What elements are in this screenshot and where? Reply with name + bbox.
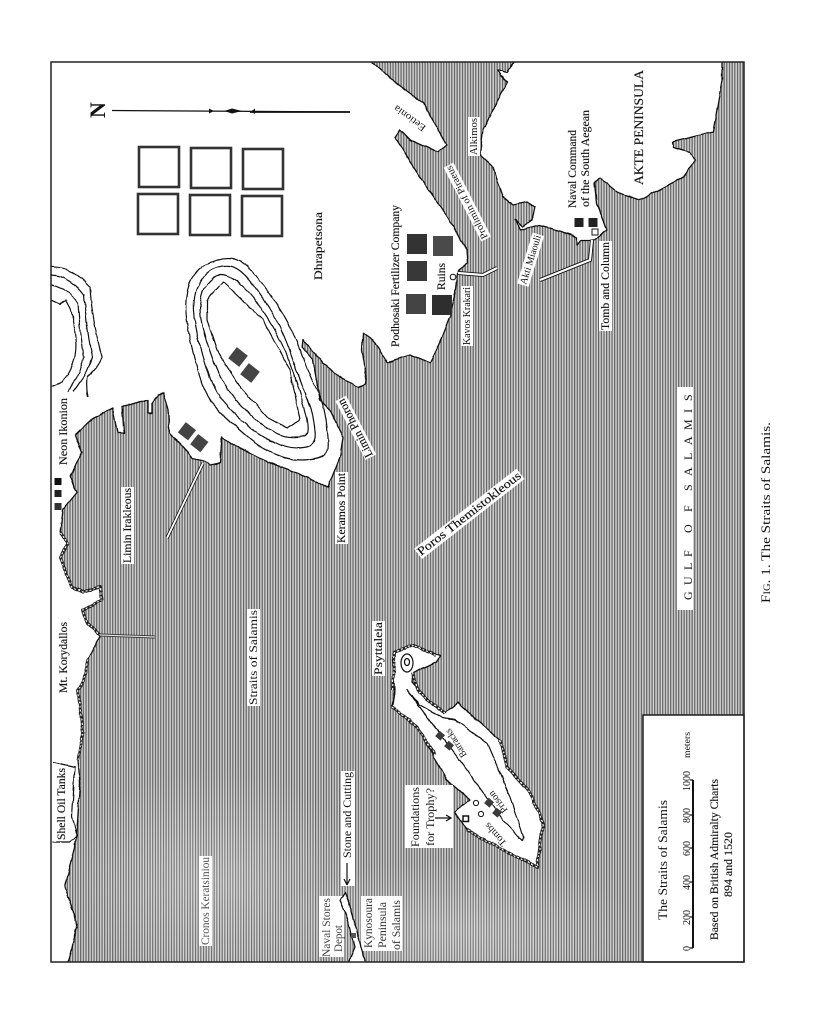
label: Naval Stores Depot [319, 896, 345, 957]
label: Straits of Salamis: Straits of Salamis [246, 610, 260, 705]
scale bar: 400 [682, 875, 693, 890]
building blocks [54, 147, 598, 510]
land: Akte Peninsula [480, 56, 722, 245]
labels on Psyttaleia: Barracks, Prison, Tombs [443, 726, 510, 848]
hill contours: Dhrapetsona [186, 258, 328, 460]
land: Piraeus mainland and Dhrapetsona [45, 56, 468, 968]
labels on land: Neon Ikonion [56, 398, 70, 465]
labels on Psyttaleia: Barracks, Prison, Tombs: Tombs [483, 820, 509, 848]
Shell oil tanks enclosure [53, 762, 77, 842]
label: Kynosoura Peninsula of Salamis: Kynosoura [361, 897, 375, 948]
scale bar: 600 [682, 841, 693, 856]
label: Kynosoura Peninsula of Salamis: of Salamis [389, 900, 403, 950]
labels on land: Ruins [434, 263, 448, 290]
label: Naval Stores Depot: Naval Stores [319, 898, 333, 957]
hill contours: northern hill [51, 267, 102, 397]
land: Kynosoura Peninsula [340, 892, 366, 968]
label: Tomb and Column: Tomb and Column [598, 242, 612, 330]
north arrow [85, 102, 350, 118]
scale bar [682, 731, 693, 951]
label: Psyttaleia: Psyttaleia [371, 621, 385, 675]
label: Alkimos: Alkimos [469, 118, 480, 155]
legend panel with title and scale bar [643, 715, 744, 962]
labels on land: Shell Oil Tanks [54, 768, 68, 840]
labels on land: Podhosaki Fertilizer Company [388, 205, 402, 347]
label: Prolimin of Piraeus: Prolimin of Piraeus [444, 163, 491, 241]
figure caption: Fig. 1. The Straits of Salamis. [758, 422, 773, 603]
scale bar: 800 [682, 808, 693, 823]
label: Poros Themistokleous: Poros Themistokleous [414, 468, 524, 558]
label: Gulf of Salamis: GULF OF SALAMIS [681, 394, 695, 600]
scale bar: 1000 [682, 771, 693, 791]
labels on land: Dhrapetsona [311, 211, 325, 280]
legend panel with title and scale bar: 894 and 1520 [721, 832, 735, 897]
moles and breakwaters [100, 240, 592, 637]
labels on land: Mt. Korydallos [56, 622, 70, 693]
map frame and sea hatching [51, 62, 744, 1000]
labels on land: Naval Command [565, 130, 579, 208]
labels on land [54, 69, 646, 840]
label: Limin Phoron: Limin Phoron [334, 397, 376, 460]
frame outline [51, 62, 744, 962]
label: Foundations for Trophy with arrow: for Trophy? [423, 788, 437, 846]
label: Kynosoura Peninsula of Salamis: Peninsula [375, 901, 389, 948]
island: Psyttaleia [392, 645, 543, 867]
label: Foundations for Trophy with arrow [405, 785, 453, 848]
label: Kynosoura Peninsula of Salamis [361, 896, 403, 951]
rocky shoreline under Mt. Korydallos [60, 533, 102, 760]
label: Limin Irakleous: Limin Irakleous [120, 488, 134, 563]
legend title: The Straits of Salamis [655, 800, 670, 920]
label: Akti Miaouli: Akti Miaouli [518, 234, 544, 286]
legend source note: Based on British Admiralty Charts [707, 779, 721, 940]
label: Kavos Krakari: Kavos Krakari [462, 287, 473, 345]
label: Cronos Keratsiniou: Cronos Keratsiniou [198, 857, 212, 945]
label: Stone and Cutting with arrow: Stone and Cutting [340, 772, 354, 858]
north arrow: N [85, 102, 110, 118]
label: Foundations for Trophy with arrow: Foundations [408, 787, 422, 847]
labels on land: of the South Aegean [578, 110, 592, 207]
labels on Psyttaleia: Barracks, Prison, Tombs: Prison [487, 788, 510, 815]
scale bar: meters [682, 731, 692, 758]
scale bar: 0 [682, 946, 693, 951]
label: Naval Stores Depot: Depot [331, 924, 345, 952]
label: Keramos Point: Keramos Point [334, 472, 348, 543]
labels on Psyttaleia: Barracks, Prison, Tombs: Barracks [443, 726, 470, 759]
scale bar: 200 [682, 910, 693, 925]
labels on land: Eetionia [391, 102, 428, 133]
labels on land: AKTE PENINSULA [631, 69, 646, 185]
